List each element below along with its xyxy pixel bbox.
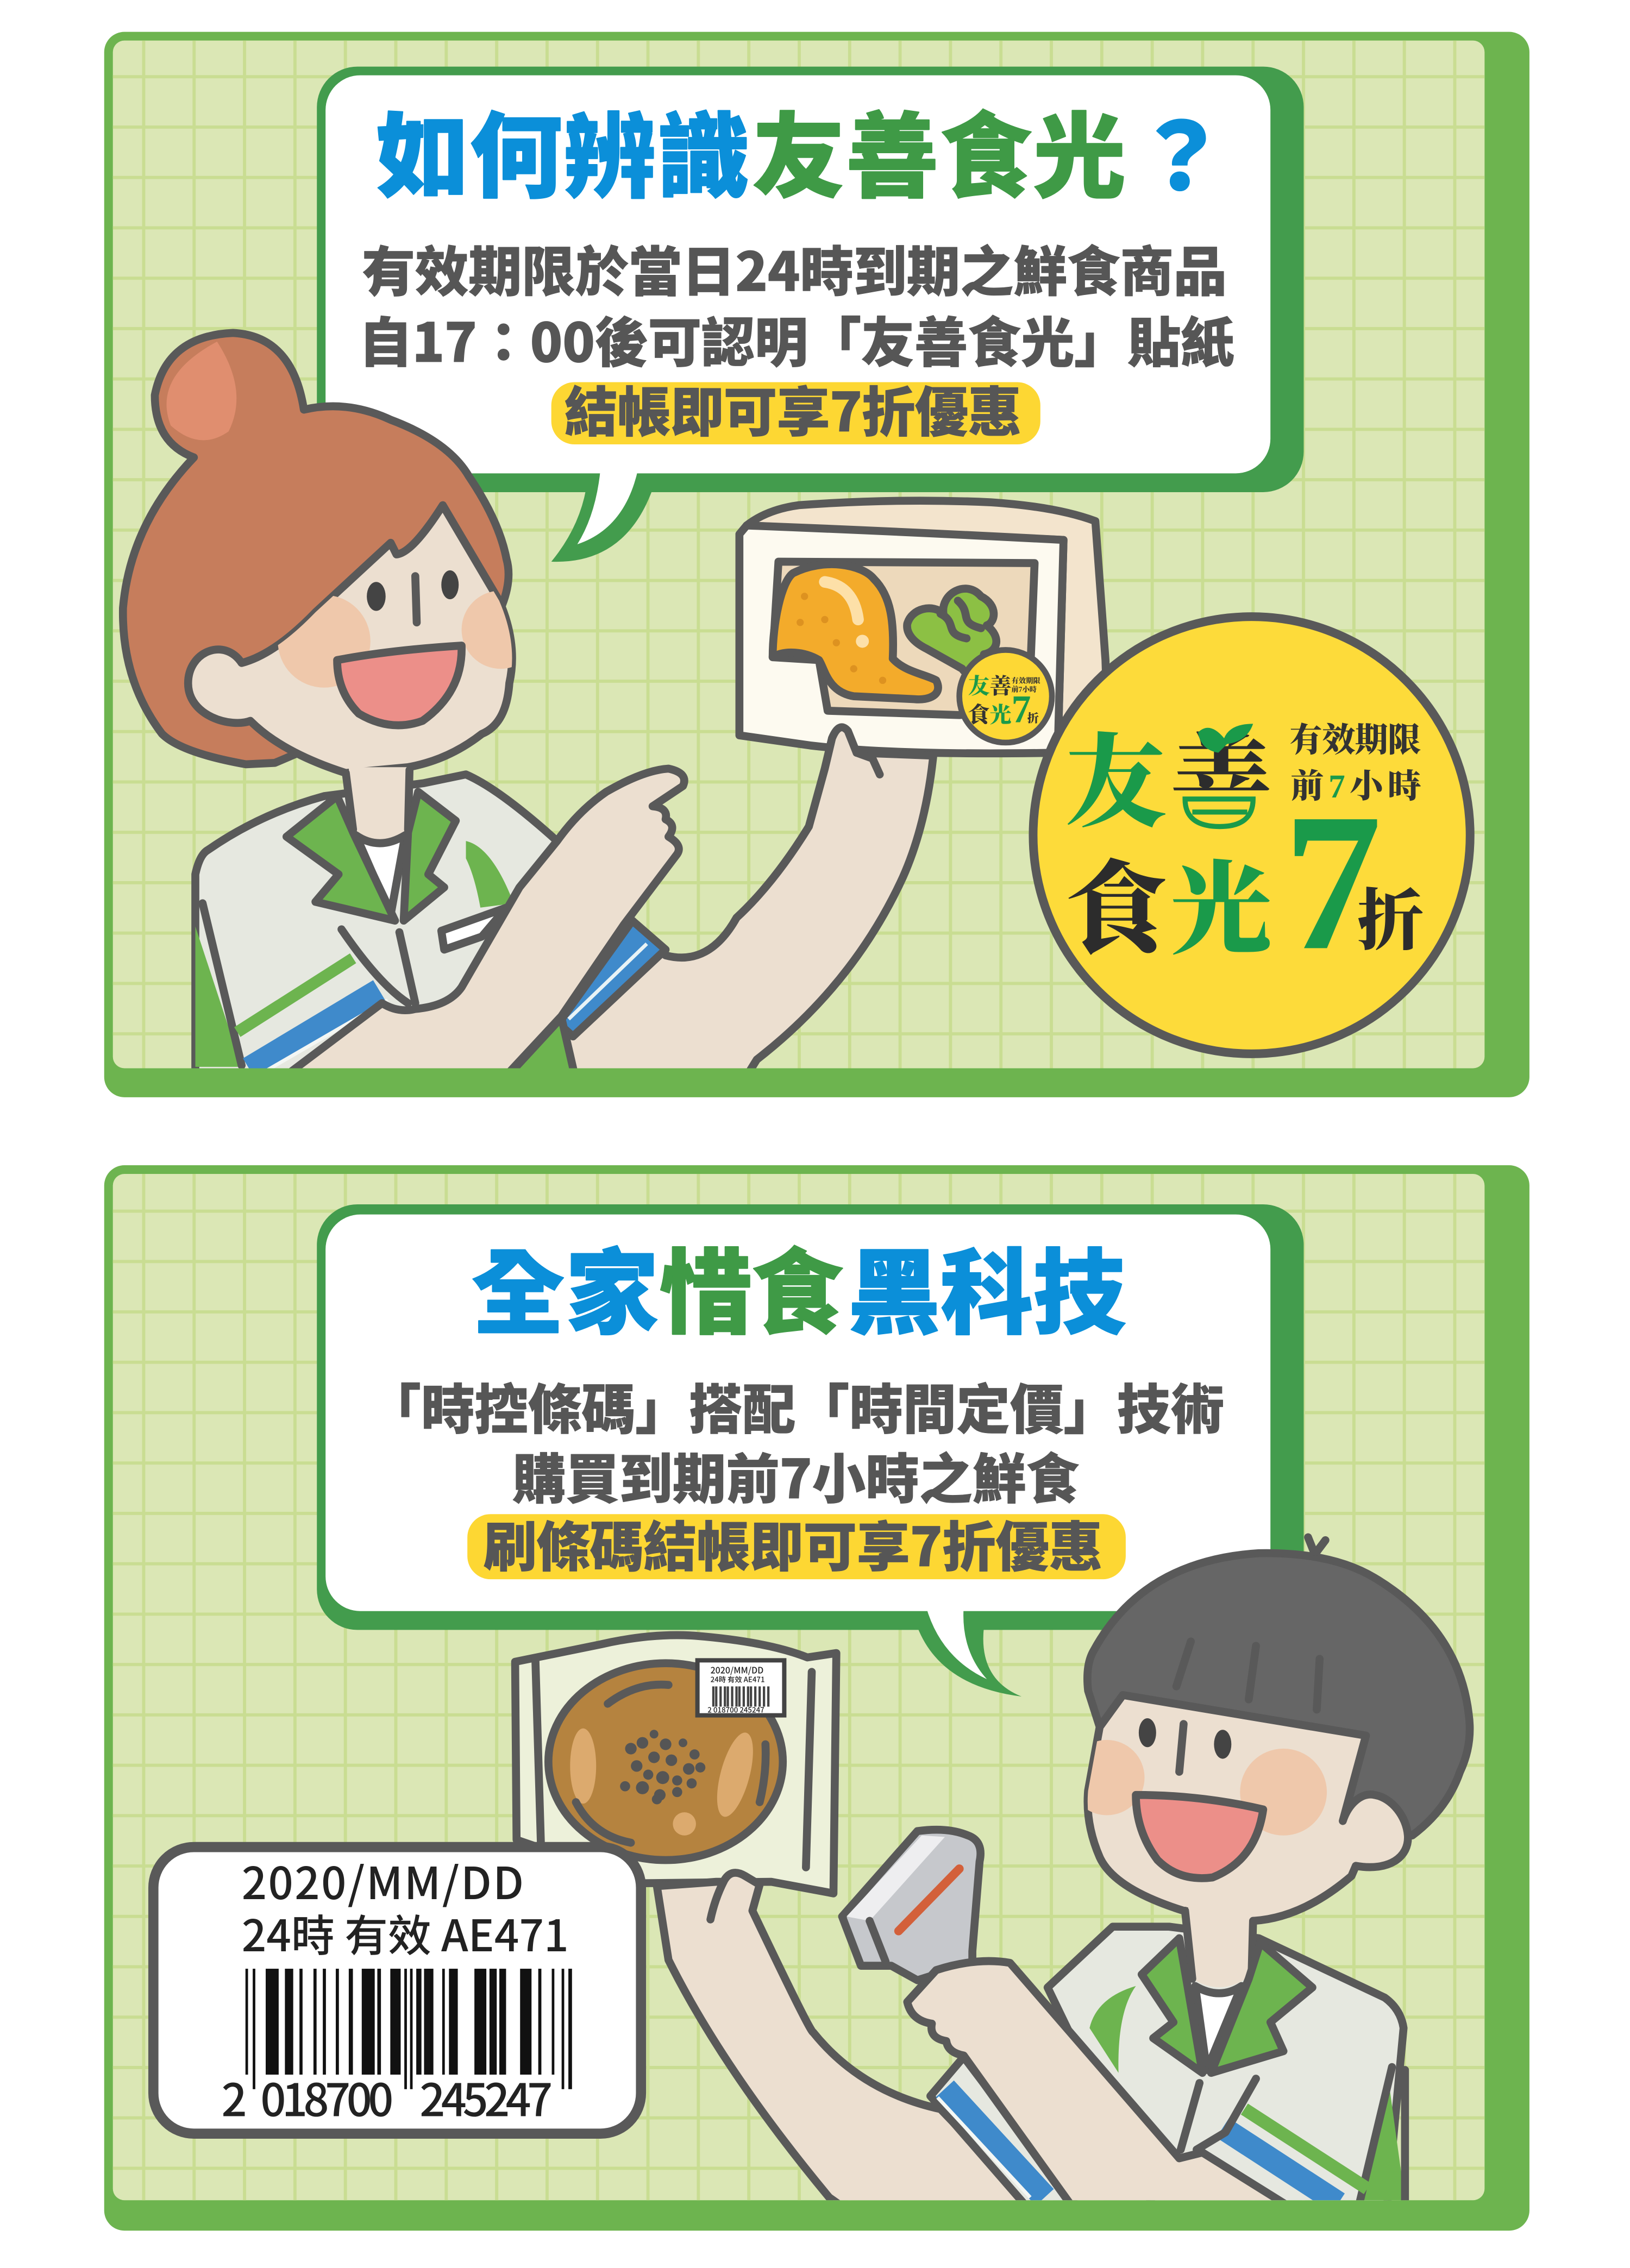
shirt [196,775,622,1078]
sesame seeds [620,1730,705,1805]
arm holding bread [657,1873,1042,2215]
mouth [337,645,462,725]
eyes and nose [1139,1718,1156,1747]
scanner [842,1830,981,1980]
face with ear [1088,1695,1408,1921]
heading: FamilyMart food-saving tech: 全家 [472,1219,659,1353]
illustration: packaged bread with barcode [515,1635,836,1893]
callout: scan barcode for 30 percent off: 刷條碼結帳即可享7折優惠 [483,1505,1102,1582]
icon: small friendly food sticker: 7 [1012,688,1031,731]
badge: friendly food 30 percent off: 有效期限 [1289,722,1421,759]
collar [1142,1938,1202,2073]
shirt stripes [237,958,353,1032]
callout: enlarged barcode label: 245247 [419,2064,553,2129]
icon: small friendly food sticker: 前7小時 [1012,685,1037,694]
badge: friendly food 30 percent off: 前 7 小時 [1290,768,1421,805]
callout: 30 percent off at checkout: 結帳即可享7折優惠 [565,370,1021,447]
heading: how to identify friendly food: ？ [1134,83,1227,217]
neck and tee [349,767,410,842]
heading: how to identify friendly food [376,83,1227,217]
mouth [1136,1795,1263,1878]
heading: how to identify friendly food: 友善食光 [753,83,1126,217]
icon: small friendly food sticker: 友 [968,674,990,698]
callout: enlarged barcode label: 018700 [260,2064,393,2129]
panel: FamilyMart anti-waste technology [104,1165,1529,2231]
heading: FamilyMart food-saving tech [472,1219,1126,1353]
text block: barcode explanation: 「時控條碼」搭配「時間定價」技術 [367,1367,1224,1444]
text block: sticker explanation [359,230,1234,378]
badge: friendly food 30 percent off [1033,617,1470,1054]
face with ear [188,505,512,773]
vegetable [907,589,996,674]
callout: enlarged barcode label: 2020/MM/DD [242,1849,524,1912]
icon: small friendly food sticker [960,650,1052,743]
heading: FamilyMart food-saving tech: 惜食 [660,1219,844,1353]
speech bubble [317,67,1303,562]
callout: enlarged barcode label: 2 [221,2064,247,2129]
badge: friendly food 30 percent off: 光 [1170,856,1272,967]
small barcode sticker: 2020/MM/DD [711,1663,763,1676]
barcode [246,1969,572,2089]
small barcode sticker: 24時 有效 AE471 [711,1674,765,1684]
text block: barcode explanation [367,1367,1224,1514]
hair [123,333,509,764]
arm holding box [550,727,933,1078]
hair [1087,1553,1470,1836]
heading: how to identify friendly food: 如何辨識 [376,83,749,217]
callout: enlarged barcode label [153,1847,641,2134]
small barcode sticker: 2 018700 245247 [707,1704,764,1714]
sleeve band [559,921,666,1036]
icon: small friendly food sticker: 光 [990,703,1012,727]
pointing arm [282,769,684,1078]
badge: friendly food 30 percent off: 友 [1065,728,1166,840]
heading: FamilyMart food-saving tech: 黑科技 [848,1219,1126,1353]
shirt stripes [1244,2109,1368,2189]
badge: friendly food 30 percent off: 7 [1283,773,1382,991]
eyes and nose [367,582,386,611]
icon: small friendly food sticker: 有效期限 [1012,676,1040,685]
illustration: woman holding box [123,333,933,1078]
badge: friendly food 30 percent off: 折 [1357,884,1424,958]
shirt [1048,1927,1403,2215]
illustration: food box [739,501,1108,753]
text block: barcode explanation: 購買到期前7小時之鮮食 [512,1437,1080,1514]
speech bubble [317,1204,1303,1697]
neck and tee [1188,1905,1253,1987]
badge: friendly food 30 percent off: 食 [1067,856,1170,967]
fried chicken [773,564,938,699]
panel: how to identify friendly food [104,32,1529,1097]
small barcode sticker [698,1660,784,1716]
callout: enlarged barcode label: 24時 有效 AE471 [242,1901,569,1964]
arm and hand holding scanner [907,1961,1302,2215]
sleeve cuff [930,2057,1078,2208]
text block: sticker explanation: 有效期限於當日24時到期之鮮食商品 [362,230,1227,307]
collar [286,796,395,921]
text block: sticker explanation: 自17：00後可認明「友善食光」貼紙 [359,300,1234,378]
icon: small friendly food sticker: 折 [1027,712,1039,725]
badge: friendly food 30 percent off: 善 [1170,728,1272,840]
icon: small friendly food sticker: 食 [968,703,990,727]
illustration: man with scanner [657,1537,1470,2215]
icon: small friendly food sticker: 善 [990,674,1011,698]
